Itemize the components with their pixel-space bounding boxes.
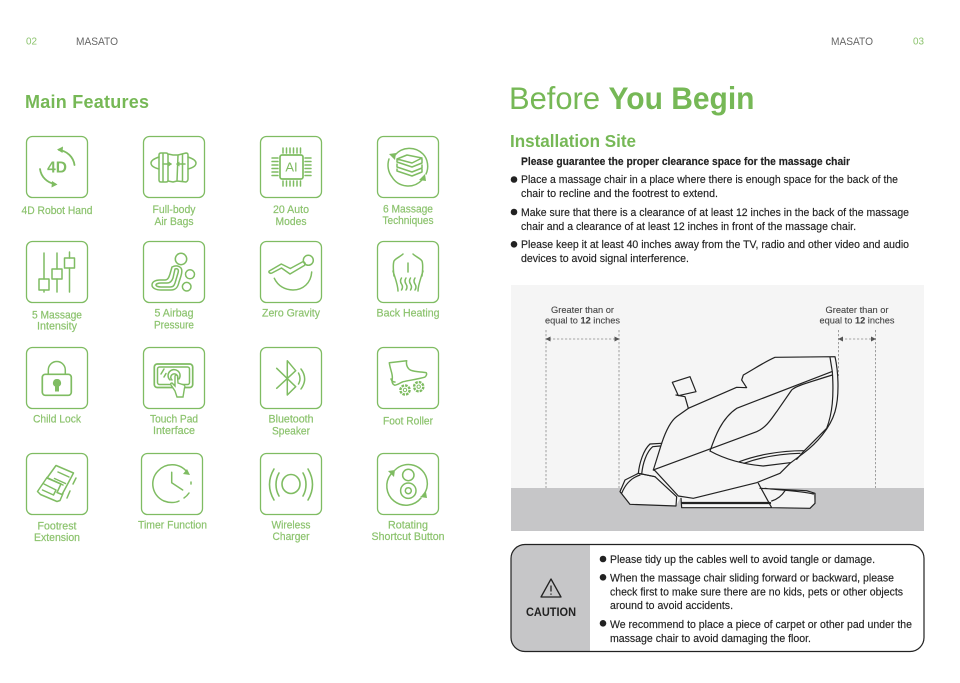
label: [272, 520, 311, 543]
label: 6 Massage: [383, 204, 433, 216]
left clearance arrow: [546, 330, 620, 488]
page number right: 03: [913, 36, 924, 48]
label: [268, 414, 314, 438]
text block: clearance instructions: Please guarantee the proper clearance space for the massage chair: [521, 156, 851, 168]
label: Zero Gravity: [262, 308, 320, 320]
feature: 5 Massage Intensity: [26, 242, 88, 332]
caution list: We recommend to place a piece of carpet or other pad under the: [610, 619, 912, 631]
icon: layered techniques: [378, 136, 438, 198]
caution list: When the massage chair sliding forward or backward, please: [610, 572, 894, 584]
feature: Timer Function: [138, 454, 207, 532]
icon: bluetooth: [260, 348, 322, 408]
caution list: massage chair to avoid damaging the floor.: [610, 633, 811, 645]
label: Full-body: [152, 204, 196, 216]
right clearance arrow: [838, 330, 876, 488]
icon: rotating button: [378, 454, 438, 514]
caution list: Please tidy up the cables well to avoid tangle or damage.: [610, 554, 875, 566]
label: 5 Massage: [32, 310, 82, 322]
label: [32, 310, 82, 332]
label: 5 Airbag: [154, 308, 194, 320]
label: Shortcut Button: [372, 531, 444, 543]
icon: sliders: [26, 242, 88, 302]
feature: Zero Gravity: [260, 242, 322, 320]
right clearance label: equal to 12 inches: [820, 316, 895, 326]
label: Extension: [34, 532, 80, 544]
feature: 6 Massage Techniques: [378, 136, 438, 227]
feature: Full-body Air Bags: [144, 136, 204, 228]
label: Air Bags: [154, 216, 194, 228]
feature: Bluetooth Speaker: [260, 348, 322, 438]
icon: AI chip: AI: [285, 160, 298, 174]
text block: clearance instructions: Make sure that there is a clearance of at least 12 inches in the back of the massage: [521, 207, 909, 219]
label: [382, 204, 434, 227]
massage chair illustration: [620, 357, 838, 508]
caution list: around to avoid accidents.: [610, 600, 733, 612]
label: [273, 204, 309, 228]
label: [150, 414, 198, 437]
feature: Wireless Charger: [260, 454, 322, 543]
caution label: CAUTION: [526, 607, 576, 619]
label: Footrest: [38, 520, 76, 532]
label: [152, 204, 196, 228]
label: Timer Function: [138, 520, 207, 532]
label: 20 Auto: [273, 204, 309, 216]
icon: 4D: 4D: [47, 160, 67, 176]
text block: clearance instructions: devices to avoid signal interference.: [521, 253, 689, 265]
icon: reclined body: [260, 242, 322, 302]
label: Pressure: [154, 320, 194, 332]
text block: clearance instructions: [511, 156, 909, 265]
label: Speaker: [272, 426, 310, 438]
label: Touch Pad: [150, 414, 198, 426]
feature: Rotating Shortcut Button: [372, 454, 444, 543]
feature: Back Heating: [376, 242, 440, 320]
caution list: [600, 554, 912, 645]
label: Back Heating: [376, 308, 440, 320]
title: Before You Begin: Before: [509, 80, 600, 116]
feature: Foot Roller: [378, 348, 438, 428]
text block: clearance instructions: chair and a clearance of at least 12 inches in front of the massage chair.: [521, 221, 856, 233]
left clearance label: Greater than or: [551, 305, 614, 316]
feature: 4D Robot Hand: [22, 136, 92, 217]
label: Intensity: [37, 320, 77, 332]
right clearance label: [820, 305, 895, 326]
icon: touch pad: [144, 348, 204, 408]
text block: clearance instructions: Please keep it at least 40 inches away from the TV, radio and other video and audio: [521, 239, 909, 251]
panel: clearance diagram: [511, 285, 924, 531]
panel: caution box: [511, 544, 924, 652]
label: Foot Roller: [383, 416, 433, 428]
feature: Touch Pad Interface: [144, 348, 204, 437]
icon: foot with rollers: [378, 348, 438, 408]
icon: warning triangle: [541, 579, 561, 597]
label: Modes: [276, 216, 307, 228]
label: Rotating: [388, 520, 428, 532]
label: [154, 308, 194, 332]
label: Charger: [272, 531, 310, 543]
icon: footrest: [26, 454, 88, 514]
text block: clearance instructions: Place a massage chair in a place where there is enough space for the back of the: [521, 174, 898, 186]
icon: seated airbags: [144, 242, 204, 302]
icon: clock: [142, 454, 202, 514]
feature: Child Lock: [26, 348, 88, 426]
label: Interface: [153, 425, 195, 437]
label: [372, 520, 444, 543]
caution list: check first to make sure there are no kids, pets or other objects: [610, 586, 903, 598]
feature: 20 Auto Modes: [260, 136, 322, 228]
text block: clearance instructions: chair to recline and the footrest to extend.: [521, 188, 718, 200]
brand right: MASATO: [831, 36, 873, 48]
label: [34, 520, 80, 544]
title: Before You Begin: You Begin: [608, 80, 754, 116]
label: Wireless: [272, 520, 311, 532]
feature: Footrest Extension: [26, 454, 88, 544]
label: 4D Robot Hand: [22, 205, 92, 217]
label: Techniques: [382, 215, 434, 227]
icon: back with heat: [378, 242, 438, 302]
page number left: 02: [26, 36, 37, 48]
label: Child Lock: [33, 414, 81, 426]
title: Before You Begin: [509, 80, 754, 116]
icon: padlock: [26, 348, 88, 408]
left clearance label: [545, 305, 620, 326]
left clearance label: equal to 12 inches: [545, 316, 620, 326]
brand left: MASATO: [76, 36, 118, 48]
feature: 5 Airbag Pressure: [144, 242, 204, 332]
heading: Installation Site: Installation Site: [510, 131, 636, 151]
label: Bluetooth: [268, 414, 314, 426]
heading: Main Features: Main Features: [25, 92, 149, 112]
icon: wireless waves: [260, 454, 322, 514]
right clearance label: Greater than or: [826, 305, 888, 316]
icon: air bags: [144, 136, 204, 198]
